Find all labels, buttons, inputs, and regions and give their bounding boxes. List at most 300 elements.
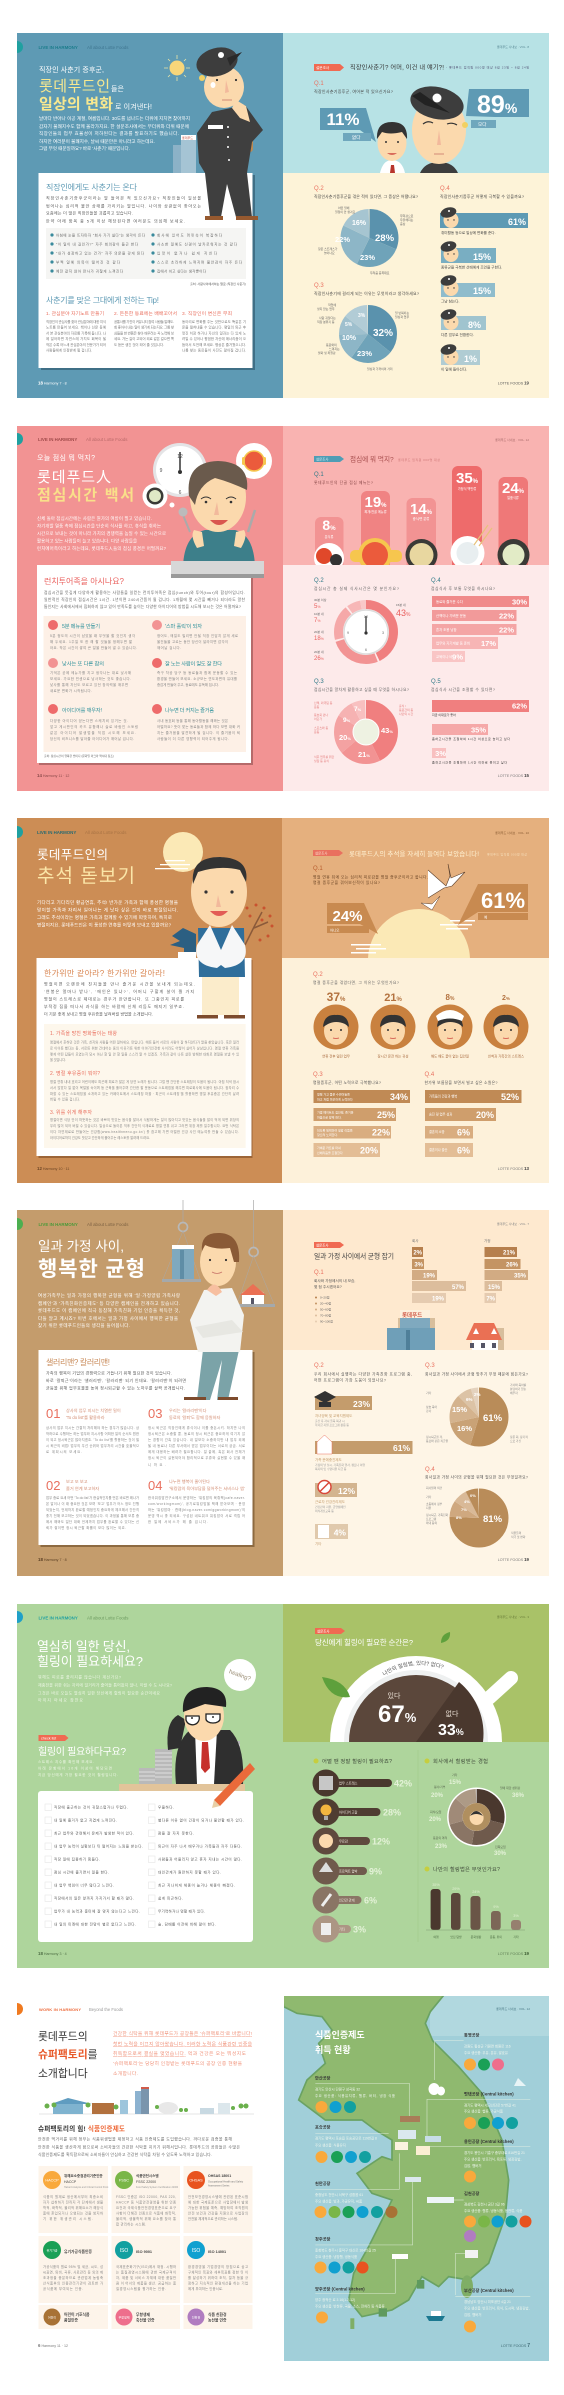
Q2 heading: 점심시간 총 실제 식사시간은 몇 분인가요?	[314, 586, 399, 591]
Q5 heading	[431, 679, 495, 692]
card: FSSC 22000: FSSC 22000	[136, 2180, 156, 2184]
chart: pie Q2: 22%	[335, 235, 350, 244]
chart: food donut: 나만의 시간	[399, 711, 413, 716]
chart: Q3 bars: 20%	[360, 1146, 378, 1156]
chart: company bars: 19%	[432, 1296, 445, 1302]
page footer left: 18 Harmony 3 · 4	[38, 1951, 67, 1956]
chart: food donut: 43%	[381, 726, 393, 735]
chart: pie Q3: 동료와 같은 직군원	[426, 1439, 449, 1443]
card: HACCP: 품에 혼입되거나 오염되는 것을 방지하	[43, 2210, 103, 2216]
chart: Q4 bars	[432, 596, 529, 662]
chart: Q2 bars: 기타	[315, 1541, 322, 1546]
survey title	[349, 849, 527, 858]
chart: Q4 bars: 교육이나 비	[436, 654, 453, 659]
chart: lunch menu bars: 14%	[410, 501, 433, 518]
chart: Q2 bars: 4%	[334, 1528, 346, 1538]
left page background	[17, 818, 282, 1183]
chart: Q3 bars: 가볍 페이트도 집안일, 즐거운	[317, 1110, 354, 1114]
panel: checklist: 사람들과 어울리지 않고 혼자 지내는 시간이 많다.	[158, 1856, 242, 1862]
plant: Cheongju: 주요 생산품: 냉장햄, 냉동식품	[315, 2254, 357, 2259]
chart: Q2 bars: 가족 문에충진제도	[315, 1457, 343, 1462]
chart: lunch menu bars: 중식/면 분류	[413, 516, 429, 521]
intro text: 뭐해도 피로를 풀리지를 않습니다 계신가요?	[38, 1674, 122, 1680]
survey badge: 설문조사	[317, 1628, 330, 1634]
chart: food donut: 낮잠 등 휴식	[314, 758, 329, 763]
chart: Q3 bars	[314, 1090, 410, 1157]
chart: pie Q4: 초등에서 정부	[426, 1502, 443, 1506]
chart: Q3 bars: 찾으려 노력한다.	[317, 1132, 338, 1137]
Q2 heading: 직장인사춘기증후군을 겪은 적이 있다면, 그 증상은 어땠나요?	[314, 194, 419, 199]
survey title	[350, 64, 529, 72]
chart: pie Q4: 4%	[464, 1499, 470, 1504]
chart: methods bars: 문화생활	[471, 1934, 482, 1939]
section header: LIVE IN HARMONY	[37, 830, 76, 835]
paragraph: 바로 '칼퇴근'이라는 '샐러리맨', '칼러리맨' 되기 인데요. '칼러리맨'이 되려면	[46, 1377, 186, 1383]
panel: article card	[37, 565, 253, 765]
tip 02: 본 말이나 이 때 중요한 것은 보며 '보고' 업무가 어느 정도 진행	[46, 1501, 139, 1506]
title: 일과 가정 사이,	[38, 1239, 124, 1254]
intro text: 롯데푸드도 이 캠페인에 적극 동참해 가족친화 기업 인증을 획득한 것,	[38, 1307, 180, 1314]
section header: All about Lotte Foods	[87, 45, 129, 50]
right page bottom background	[283, 1350, 549, 1576]
card: ISO 9001	[112, 2236, 180, 2303]
panel: checklist: 퇴근이 자주 나서 배우거나 가족들과 자주 다툰다.	[158, 1844, 242, 1848]
chart: Q4 bars	[425, 1090, 522, 1157]
tip 04: 나누면 행복이 줄이된다	[169, 1478, 210, 1485]
paragraph	[44, 590, 246, 609]
tip item 3: 기억은 곧에 메뉴가를 지고 생각나는 대로 낮사해	[50, 670, 131, 675]
check list intro: 스트레스 지수를 확인해 보세요.	[38, 1759, 94, 1764]
tip column 1: 사람들에게 인정받게 될 겁니다.	[46, 348, 92, 352]
chart: reasons 1: 37%	[327, 990, 346, 1004]
chart: Q4 bars: 승진 및 업무 성과	[429, 1112, 452, 1116]
Q1 heading: 회사와 가정에서의 내 모습,	[314, 1278, 355, 1283]
survey title: 직장인사춘기? 어머, 이건 내 얘기?!	[350, 64, 444, 72]
spread 3: chuseok	[17, 818, 549, 1183]
Q1 heading: 명절 연휴 뒤에 오는 심리적 피로감을 명절 증후군이라고 합니다.	[313, 874, 428, 880]
chart: food donut: 20%	[339, 733, 351, 742]
tip 02: 02	[46, 1478, 60, 1493]
card: HACCP: 학적, 화학적, 물리적 위해요소가 해당식	[43, 2205, 103, 2210]
heading: 직장인에게도 사춘기는 온다	[46, 182, 138, 192]
card: pork certification: 축산물 인증	[136, 2318, 155, 2322]
checklist box: 아침에 눈을 뜨자마자 "회사 가기 싫다"는 생각이 든다	[56, 232, 146, 237]
Q2 heading: Q.2	[313, 972, 323, 978]
tip column 1: 직장인이 관심사를 찾아 관심분야에 대한 지식	[46, 319, 106, 324]
panel: checklist: 별다른 이유 없이 긴장이 되거나 불안할 때가 있다.	[158, 1818, 244, 1822]
intro text	[113, 2030, 253, 2077]
plant: Cheongju: 충청북도 청주시 흥덕구 대신로 164번길 25	[315, 2248, 376, 2252]
card: ISO 9001: ISO 9001	[136, 2250, 152, 2254]
chart: pie Q2: 두려움 증폭돼요	[370, 270, 390, 275]
section tab	[17, 41, 23, 53]
chart: Q3 bars: 되도록 일찍하여 생활 리듬을	[317, 1128, 353, 1132]
chart: company bars	[412, 1238, 466, 1303]
Q1 heading: 롯데푸드인의 단골 점심 메뉴는?	[314, 480, 373, 485]
plant: Busan: 경남남도 양산시 미포공단 4길 21	[464, 2299, 511, 2304]
chart: experience donut: 20%	[429, 1817, 442, 1823]
checklist box: 사소한 일에도 신경이 날카로워지는 것 같다	[157, 241, 238, 246]
check list badge	[38, 1735, 68, 1741]
intro text: 자기개발 열풍 속에 점심시간을 단순히 식사를 하고, 휴식을 취하는	[37, 522, 161, 530]
chart: pie Q3: 상호 육아	[426, 1405, 437, 1409]
title: 힐링이 필요하세요?	[37, 1654, 143, 1669]
card: OHSAS 18001: Assessment Series	[208, 2184, 230, 2188]
tip item 4: 증감게 만들어 주고, 동료애도 유독해 집니다.	[157, 682, 219, 687]
page header right: 롯데푸드 사내보 · VOL. 3	[497, 1614, 529, 1619]
tip item 6: 사내 동호회 등을 통해 동아활동을 해봐는 것은	[157, 718, 228, 723]
tip 03: 정시 퇴근은 직장인에게 휴식이나 이를 충돈시키. 하지만 나의	[148, 1425, 245, 1430]
card: organic processing: 산식품부의 인증관리기관이 검토한 가	[43, 2280, 103, 2286]
chart: pie Q2: 증상	[400, 221, 406, 226]
card: organic processing: 유기가공	[46, 2248, 58, 2252]
chart: Q2 bars: 의식개선교육 등	[315, 1509, 334, 1513]
panel: checklist: 쉽게 피곤하다.	[158, 1896, 183, 1900]
map footer: LOTTE FOODS 7	[501, 2343, 530, 2349]
chart: Q4 bars: 17%	[481, 639, 496, 648]
chart: lollipop bars: 28%	[383, 1808, 401, 1818]
tip item 5: 다양한 아이디어 얻는다면 스케치비 있거는 것.	[50, 718, 128, 723]
chart: pie Q3: 잦은 회, 장기적	[510, 1435, 528, 1439]
chart: Q2 bars: 자녀양육 및 교육지원제도	[315, 1413, 353, 1418]
Q4 heading: Q.4	[440, 186, 450, 192]
chart: Q5 bars	[432, 700, 529, 764]
chart: home bars	[484, 1238, 528, 1303]
chart: reasons 4: 2%	[502, 995, 510, 1002]
survey badge	[314, 456, 344, 462]
spread 2: lunch time	[17, 426, 549, 791]
intro text	[39, 115, 190, 152]
paragraph: 직장인사춘기증후군이라는 말 들어본 적 있으신가요? 직장인들이 일상을	[46, 194, 201, 200]
plant: Cheonan: 천안공장	[315, 2180, 331, 2186]
paragraph: 명절이 스트레스로 제대로는 경우가 만만합니다. 또 그중인지 피로를	[44, 996, 184, 1002]
heading: 샐러리맨? 칼러리맨!	[46, 1358, 110, 1367]
chart: pie Q3	[426, 1383, 528, 1443]
chart: pie Q3: 느껴지는	[329, 346, 340, 351]
panel: checklist: 최근 업무와 관련해서 문제가 발생한 적이 있다.	[54, 1830, 134, 1836]
card: pork certification: 무항생제	[118, 2314, 130, 2320]
Q3 heading: 점심시간을 알차게 활용하고 싶을 때 무엇을 하시나요?	[314, 687, 409, 692]
tip 02: 되었는지, 언제까지 완료할 예정인지 중요하게 체크해서 간단히	[46, 1507, 139, 1512]
card: HACCP: 기 위한 위생관리 시스템.	[43, 2216, 93, 2221]
card: FSSC 22000: Food Safety System Certification 22000	[136, 2186, 179, 2189]
chart: Q4 bars: 22%	[499, 612, 514, 620]
chart: lunch menu bars: 19%	[364, 494, 387, 511]
tip 1: 명절에서 흔하던 것은 가족, 친지와 사람들 어떤 일하세요. 만입니다. 예를 들어 서로의 사람이 잘 하지않다가 말을 찾았습니다. 혹은 일러	[50, 1040, 239, 1044]
chart: experience donut: 36%	[512, 1793, 525, 1799]
card: healthy food: 어린이 기호식품	[64, 2312, 90, 2317]
card: OHSAS 18001: 안전 보건과 건강을 지원으로 사업장의	[188, 2210, 248, 2216]
title	[37, 848, 135, 887]
chart: experience donut: 봉사/기부	[434, 1784, 446, 1789]
chart: Q4 bars: 가족들의 건강과 행복	[429, 1094, 457, 1098]
tip 01: 막하으로 수행하는 하는 업무와 지시사항 어떠한 일의 순서도 원한	[46, 1431, 139, 1436]
chart: pie Q3	[317, 302, 409, 371]
tip 3: 이다 자연재료로 만들어는 건강함(www.healthmenu.go.kr/) 를 참고해 가면 어떨한 건강 사진 메뉴여를 만들 수 있습니다.	[50, 1129, 239, 1134]
illustration: coffee cup chart: 33%	[438, 1722, 464, 1739]
card: ISO 9001: 질경영시스템을 평가하는 인증.	[116, 2286, 166, 2291]
chart: reasons 2	[370, 992, 416, 1058]
tip 02: 보고 또 보고	[66, 1479, 88, 1484]
Q1 heading	[314, 81, 394, 94]
chart: pie Q4: 확대 등의	[426, 1521, 437, 1525]
chart: reasons 3: 해도 해도 끝이 없는 집안일	[431, 1054, 469, 1058]
page footer left: 6 Harmony 11 · 12	[38, 2343, 68, 2348]
intro text	[38, 1674, 173, 1702]
page footer left: 18 Harmony 7 · 8	[38, 1557, 67, 1562]
plant: Yangju	[315, 2286, 385, 2324]
panel: article card	[36, 958, 252, 1158]
paragraph: 더 기분 좋게 보내고 명절 후유증을 날려버릴 방법을 소개합니다.	[44, 1010, 153, 1016]
card: OHSAS 18001: OHSAS 18001	[208, 2174, 231, 2178]
section header: WORK IN HARMONY	[39, 2007, 81, 2012]
chart: pie Q2: 열정이 안 생겨요	[335, 209, 356, 214]
chart: clock donut: 9	[347, 630, 350, 635]
panel: article card	[38, 1350, 254, 1547]
chart: Q4 bars: 그냥 참는다.	[441, 298, 460, 304]
tip item 5: 당신의 비즈니스를 달아줄 아이디어가 깨어날 겁니다.	[50, 736, 134, 741]
tip item 2	[152, 620, 238, 650]
section header: LIVE IN HARMONY	[38, 1616, 78, 1620]
chart: pie Q3: 61%	[483, 1413, 503, 1424]
card: FSSC 22000: FSSC	[119, 2178, 129, 2182]
chart: clock donut: 12	[364, 614, 369, 619]
survey badge	[313, 850, 343, 856]
chart: lunch menu bars: 가정식 백반류	[458, 486, 476, 491]
chart: experience donut: 동료의 격려	[433, 1835, 447, 1840]
chart: reasons 3: 8%	[446, 993, 455, 1002]
checklist box: 입맛이 없거나 쉽게 지친다	[157, 250, 218, 255]
plant: Pyeongtaek: 경기도 평택시 세교산단로 57번길 41	[464, 2102, 516, 2108]
legend: 70~80점	[320, 1312, 331, 1318]
tip 04: 운영 역시 좋 되세요. 구성된 네트워크 워킹맘이 서로 격립 어	[148, 1513, 245, 1518]
character: big guard	[407, 82, 468, 173]
tip 3: 무리 많이 되어 버릴 수 있습니다. 일상으로 돌아온 직후 간단히 식재료로 명절 연휴 쉬고 그러면 위장 제를 일주합니다. 요번 식탁은	[50, 1123, 239, 1128]
Q4 heading: Q.4	[431, 578, 441, 584]
checklist box: 스스로 초라하게 느껴지며 불안감이 자주 든다	[157, 259, 243, 264]
icon: sun	[164, 55, 190, 81]
chart: clock donut: 5%	[314, 604, 320, 610]
tip item 6: 어떨까요? 뜻이 맞는 동료들과 함께 하다 보면 대화 커	[157, 724, 240, 729]
chart: reasons 4	[484, 995, 528, 1058]
title: 직장인 사춘기 증후군,	[39, 65, 104, 74]
plant: Busan: 부산공장 (Central kitchen)	[464, 2287, 514, 2294]
panel: checklist: 내 일의 미래에 대한 전망이 별로 없다고 느낀다.	[54, 1922, 136, 1926]
tip 2: 서서 앉았다 일 없이 목덜을 숙이며 등 근육을 풀어주며 간단한 팔 운동으로 스트레칭을 해주면 피로회사에 도움이 됩니다. 잠자리 수	[50, 1085, 239, 1090]
paragraph	[46, 1370, 186, 1390]
chart: methods bars: 3%	[513, 1914, 519, 1918]
intro text: 하지만 여러분이 불쾌지수, 날씨 때문만은 아니라고 하는데요.	[39, 138, 155, 145]
intro text: 소개합니다.	[113, 2070, 138, 2077]
tip item 1: 5분 메뉴를 만들기	[62, 622, 100, 630]
panel: checklist: 술, 담배를 이전에 비해 많이 한다.	[158, 1922, 216, 1926]
chart: food donut: 운동	[314, 730, 320, 734]
page header right: 롯데푸드 사내보 · VOL. 7	[497, 1221, 529, 1226]
plant: Yongin: 주요 생산품: 반조리식, 육포류, 냉장김밥,	[464, 2156, 522, 2162]
chart: reasons 4: 친척과 가족간의 스트레스	[488, 1054, 524, 1058]
chart: Q4 bars: 22%	[499, 626, 514, 634]
title: 일상의 변화	[39, 96, 113, 113]
paragraph: 틈인지는 사회에서에서 집회하지 않고 있어 만족도를 높이는 다양한 아이디어의 방법을 시도해 보시는 것은 어떨까요?	[44, 604, 241, 609]
plant: Poseung: 포승공장	[315, 2124, 331, 2130]
card: eco farm: 친환경	[192, 2314, 200, 2320]
chart: clock donut: 6	[365, 647, 368, 652]
title: 롯데푸드의	[38, 2030, 88, 2043]
Q2 heading	[314, 186, 419, 199]
tip column 1	[46, 310, 106, 352]
chart: lollipop bars: 42%	[394, 1778, 412, 1788]
chart: pie Q2: 23%	[360, 253, 375, 262]
card: healthy food	[38, 2305, 108, 2329]
chart: pie Q2: 잦은 스트레스가	[318, 246, 338, 251]
card: ISO 9001: 큼 이 어서의 제품을 생산. 공급하는 품	[116, 2280, 176, 2286]
icon: ship	[426, 2311, 445, 2321]
page footer right: LOTTE FOODS 19	[498, 380, 530, 386]
right page bottom background	[282, 958, 549, 1183]
chart: pie Q3: 일상과 가까이의 거리	[367, 366, 393, 371]
map: Korea plants	[282, 1993, 549, 2361]
page footer right: LOTTE FOODS 13	[498, 1166, 530, 1171]
tip 01: 로 계획시켜 보세요.	[46, 1449, 82, 1454]
chart: pie Q4: 7%	[461, 1507, 467, 1512]
tip 1: 로 이이를 했다는 등, 서로를 위한 건네어는 동의 이유기를 위한 이야기인전한 사이라도 어떻이 실어가 상상입니다. 명절 연휴 가족을	[50, 1046, 239, 1050]
chart: experience donut: 23%	[435, 1844, 448, 1850]
chart: food donut: 운동	[314, 705, 320, 709]
chart: pie Q4: 지원	[426, 1506, 432, 1510]
chart: pie Q3: 32%	[373, 328, 393, 339]
survey title: 당신에게 힐링이 필요한 순간은?	[315, 1637, 413, 1647]
chart: 61 percent callout: 61%	[481, 888, 525, 913]
tip item 3: 보세요. 가요한 빈센으로 낮사하는 것도 좋습니다.	[50, 676, 131, 681]
card: HACCP: HACCP	[64, 2180, 77, 2184]
paragraph	[38, 2136, 240, 2157]
plant: Yongin	[464, 2138, 525, 2182]
chart: pie Q4: 8%	[456, 1515, 462, 1520]
tip item 1: 아요. 작은 시간이 쌓여 큰 일을 만들어 낼 수 있습니다.	[50, 645, 137, 650]
left and lower page background	[17, 1604, 549, 1968]
card: FSSC 22000: 물리적, 생물학적 위해 요소를 찾아 통	[116, 2216, 176, 2221]
right page top background	[283, 1604, 549, 1742]
illustration: coffee cup chart: 나만의 힐링법, 있다? 없다?	[382, 1660, 444, 1675]
plant: Gimcheon	[464, 2190, 532, 2242]
right page top background	[283, 1210, 549, 1350]
chart: pie Q3: 16%	[457, 1424, 472, 1433]
chart heading: moments	[314, 1757, 392, 1765]
chart: company bars: 2%	[413, 1250, 423, 1256]
card: organic processing: 공식품에 부여되는 인증.	[43, 2286, 83, 2291]
page footer left: 14 Harmony 11 · 12	[37, 773, 69, 778]
checklist box: "이 일이 내 길인가?" 자주 회의감이 들곤 한다	[56, 241, 139, 246]
tip 01: 상사의 업무 지시는 치열한 밀이	[66, 1407, 121, 1414]
plant: Ansan: 경기도 안산시 단원구 성곡동 32	[315, 2086, 360, 2092]
title: 열심히 일한 당신,	[37, 1639, 130, 1654]
intro text: 활용하고 있는 사람들이 늘고 있습니다. 다양 사람들을	[37, 538, 137, 544]
tip item 6	[152, 704, 240, 741]
chart: pie Q4: 적극 및 변화	[511, 1535, 526, 1539]
chart: Q3 bars: 하고 처럼 피곤하게 노력한다	[317, 1096, 353, 1102]
page footer right: LOTTE FOODS 15	[498, 773, 530, 778]
chart: company bars: 회사	[412, 1238, 419, 1243]
chart: experience donut: 친목모임	[495, 1844, 506, 1849]
chart: company bars: 3%	[414, 1262, 424, 1268]
page footer left: 12 Harmony 10 · 11	[37, 1166, 69, 1171]
card: OHSAS 18001: 안전을 체계적으로 관리하는 시스템.	[188, 2216, 238, 2221]
intro text	[38, 1292, 180, 1329]
survey badge: 설문조사	[315, 850, 328, 856]
section header: LIVE IN HARMONY	[38, 437, 77, 442]
plant: Cheongju	[314, 2236, 376, 2274]
right page bottom background	[283, 173, 549, 398]
tip column 3: 운을 떨쳐내줄 수 있습니다. 평일의 퇴근 후	[182, 325, 246, 330]
tip item 5: 아이디어를 깨우자!	[62, 706, 102, 714]
chart heading: methods: 나만의 힐링법은 무엇인가요?	[433, 1865, 500, 1873]
card: healthy food: 어린이	[48, 2314, 56, 2320]
illustration: factory skyline	[39, 2087, 254, 2114]
chart: Q2 bars	[314, 1391, 412, 1546]
tip 03: 동료의 '칼퇴'도 함께 응원하자	[169, 1414, 220, 1421]
chart: lunch menu bars	[314, 466, 530, 573]
title: 롯데푸드인의	[37, 848, 108, 862]
chart: lollipop bars: 프로젝트 압박	[339, 1868, 358, 1874]
tip 02	[46, 1478, 139, 1530]
chart: 11 percent callout	[320, 108, 376, 142]
Q5 heading: Q.5	[431, 679, 441, 685]
icon: small leaf	[441, 1632, 450, 1643]
page header right: 롯데푸드 사내보 · VOL. 8	[497, 44, 529, 49]
chart: Q4 bars: 20%	[476, 1110, 494, 1120]
checklist box: 회사에 있어도 머릿속이 복잡하다	[157, 232, 223, 237]
card: ISO 14001	[184, 2236, 252, 2303]
chart: Q3 bars: 명절 가고 몸은 수면이동을	[317, 1092, 350, 1096]
chart: food donut: 동료간의 등	[399, 707, 413, 712]
chart: pie Q3: 으로 가신	[510, 1439, 521, 1443]
paragraph: '연봉은 얼마나 받나', '애인은 있냐?', 어머니 구할게 살이 찔 가지	[44, 988, 194, 994]
chart: Q4 bars: 혼자 조용 낮잠	[436, 627, 457, 632]
tip 04: 하는 '워킹맘마 · 캔에(blog.naver.com/ggworkingmom)'의	[148, 1507, 245, 1512]
chart: food donut: 21%	[358, 750, 370, 759]
chart: methods bars: 여행	[433, 1934, 439, 1939]
page footer right: LOTTE FOODS 19	[498, 1951, 530, 1956]
tip 01: 상사의 업무 지시는 간결히 처리해야 하는 경우가 많습니다. 상	[46, 1425, 139, 1430]
tip 1: 을 것입니다.	[50, 1057, 66, 1062]
chart: clock donut: 20분 내	[314, 649, 324, 654]
chart: pie Q2: 늘어나요	[324, 250, 335, 255]
chart: reasons 2: 장시간 운전 하는 귀성	[378, 1054, 408, 1058]
card: ISO 14001: 에게 부여하는 인증서로.	[188, 2286, 223, 2291]
panel: checklist: 내 업무 능력이 실험보다 뒤 떨어지는 느낌을 받는다.	[54, 1844, 143, 1848]
icon: autumn tree	[245, 904, 274, 945]
chart: clock donut: 18%	[314, 636, 324, 642]
survey title: 점심에 뭐 먹지?	[350, 454, 394, 464]
chart: methods bars: 맛집 탐방	[450, 1934, 462, 1939]
Q2 heading: Q.2	[314, 578, 324, 584]
card: HACCP: 위해요소중점관리기준인증	[64, 2173, 103, 2178]
chart: reasons 3	[428, 993, 472, 1058]
chart: Q4 bars: 다른 업무로 전환한다.	[441, 332, 474, 337]
intro text: 직장인들의 업무 효율성이 저하된다는 결과를 발표하기도 했습니다.	[39, 130, 179, 137]
chart: methods bars: 기타	[513, 1934, 519, 1939]
chart: home bars: 7%	[486, 1296, 496, 1302]
chart: pie Q2: 어떤 일에	[338, 205, 350, 210]
survey badge	[314, 64, 344, 71]
tip 1: 맺게 어떤 답들이 모였는지 당시 아닌 할 일 안 할 일을 스스러 알 수 있겠죠. 가족과 같이 나를 살린 방해한 대화로 명절을 보낼 수 있	[50, 1052, 239, 1056]
section tab	[17, 826, 23, 838]
section subheader: Beyond the Foods	[89, 2007, 123, 2012]
card: OHSAS 18001	[184, 2166, 252, 2233]
intro text: 갑자기 불쾌지수도 함께 올라가지요. 한 설문조사에서는 무더위와 더위 때문에	[39, 123, 189, 130]
card: FSSC 22000: 사항이 더해진 인증으로 식품에 화학적,	[116, 2210, 176, 2216]
illustration: office building	[387, 1310, 435, 1350]
